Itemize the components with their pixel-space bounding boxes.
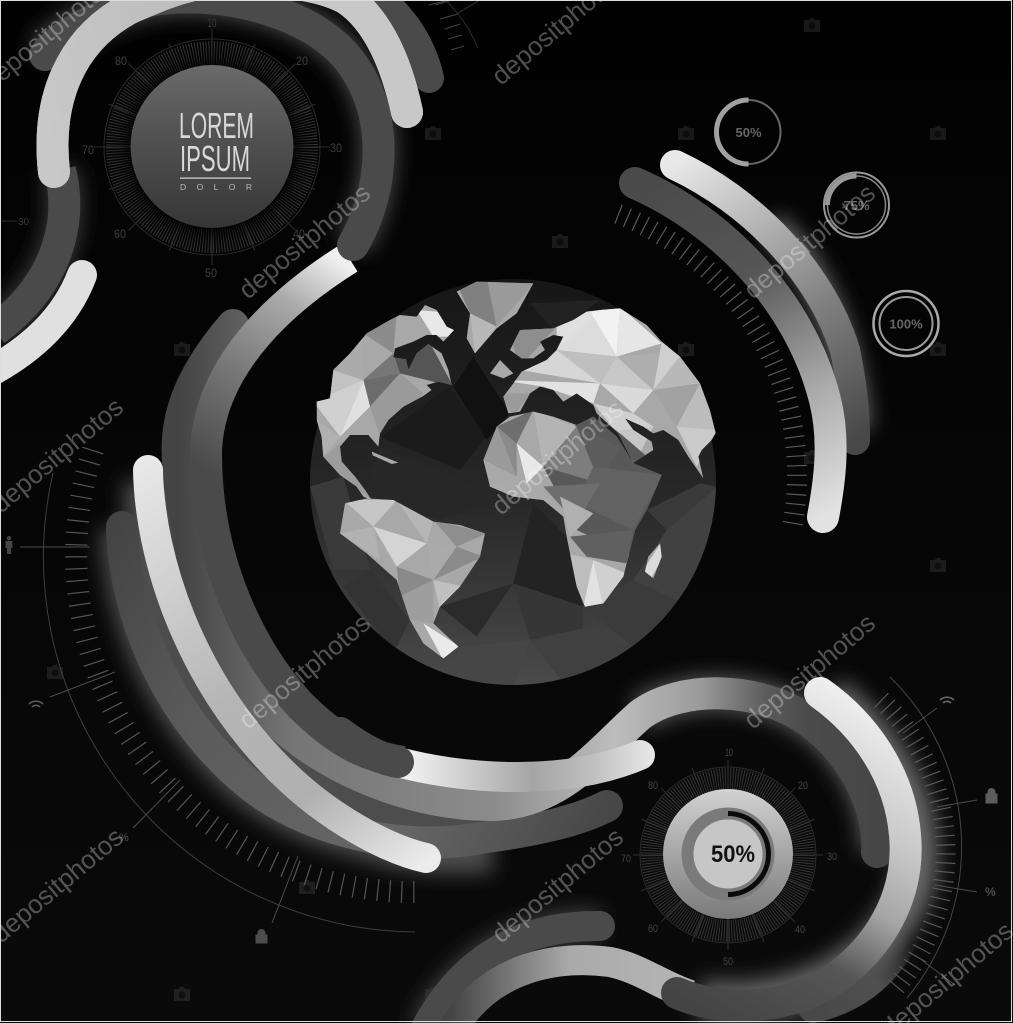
south america (343, 500, 397, 527)
dial scale numbers: 80 (115, 54, 127, 68)
depositphotos watermarks: depositphotos (486, 394, 629, 521)
dial shadow (126, 62, 298, 234)
eurasia (590, 307, 620, 357)
progress ring: 50 percent: 50% (735, 125, 762, 140)
title: lorem ipsum dolor: DOLOR (180, 182, 252, 192)
icon: lock (256, 930, 267, 943)
dial fine tick ring (652, 779, 804, 931)
dial scale numbers (82, 16, 342, 280)
depositphotos watermarks: depositphotos (233, 178, 376, 305)
icon: wifi (940, 697, 954, 703)
ribbon: upper-left S curve dark (0, 170, 64, 330)
label: percent: % (119, 832, 129, 844)
ribbon: upper-right outer (675, 165, 855, 440)
dial thin ring (104, 39, 320, 255)
ribbon: lower-right dark cap end (798, 993, 828, 1023)
panel: top-left dial (82, 16, 342, 280)
dial scale numbers: 50 (205, 266, 217, 280)
progress ring: 100 percent (874, 291, 938, 356)
ribbon: bottom light band (452, 960, 690, 1023)
title: lorem ipsum dolor: IPSUM (180, 138, 250, 179)
panel: lower-right tick arc with icons (881, 677, 997, 998)
depositphotos watermarks: depositphotos (738, 178, 881, 305)
ribbon: main white arc (148, 470, 426, 858)
dial scale numbers: 40 (795, 924, 805, 936)
depositphotos watermarks: depositphotos (486, 822, 629, 949)
africa (543, 413, 667, 557)
panel: left-edge fragment: 30 (18, 217, 30, 228)
icon: lock (986, 788, 997, 803)
ribbon: outer dark band C (122, 527, 607, 843)
panel: left-edge fragment (0, 217, 30, 228)
icon: person (6, 536, 12, 554)
ribbon: upper-right inner (635, 183, 831, 517)
ribbon: top-left dark ring (45, 0, 379, 245)
progress arc: 50 percent (728, 814, 768, 894)
dial scale numbers: 20 (296, 54, 308, 68)
panel: left tick arc with icons (6, 450, 418, 943)
ribbon: top light arc right side overlap (335, 0, 407, 112)
panel: top-right tick fragment (429, 0, 480, 50)
depositphotos watermarks: depositphotos (233, 608, 376, 735)
progress ring: 50 percent (716, 100, 780, 164)
ribbon: top-left light arc overlap (53, 0, 190, 172)
ribbon: light band ending near lower dial (390, 755, 640, 777)
icon: wifi (29, 701, 43, 707)
dial spokes (633, 760, 823, 950)
dial scale numbers: 20 (798, 780, 808, 792)
dial scale numbers (621, 747, 837, 968)
dial scale numbers: 60 (648, 923, 658, 935)
dial scale numbers: 30 (827, 851, 837, 863)
dial scale numbers: 10 (208, 16, 217, 30)
ribbon: lower-right dark cap (813, 935, 905, 1008)
title: lorem ipsum dolor (179, 105, 254, 192)
ribbon: central dark cap over band (340, 733, 398, 762)
ribbon: long gradient band B (178, 325, 877, 852)
chart: low-poly globe (310, 279, 716, 685)
north america (330, 370, 362, 394)
ribbon: lower-right ring (677, 693, 906, 1006)
dial scale numbers: 40 (293, 227, 305, 241)
dial scale numbers: 70 (621, 853, 631, 865)
dial scale numbers: 50 (723, 956, 733, 968)
label: percent: % (985, 885, 996, 899)
ribbon: central S inner band (206, 258, 403, 762)
value: 50 percent: 50% (711, 841, 755, 868)
progress ring: 75 percent (824, 172, 889, 238)
depositphotos watermarks: depositphotos (738, 608, 881, 735)
ribbon: bottom dark band (425, 926, 600, 1023)
ocean facets (310, 300, 717, 687)
progress ring (688, 814, 768, 894)
land facets (316, 282, 716, 658)
dial scale numbers: 30 (330, 141, 342, 155)
dial spokes (94, 29, 330, 265)
ribbon: top-left light arc (53, 0, 407, 172)
dial scale numbers: 60 (114, 227, 126, 241)
panel: upper-right tick arc (618, 214, 797, 528)
greenland (460, 282, 496, 326)
dial scale numbers: 10 (725, 747, 733, 759)
title: lorem ipsum dolor: LOREM (179, 105, 254, 146)
progress ring: 100 percent: 100% (889, 316, 923, 332)
dial disc (663, 789, 793, 919)
dial scale numbers: 70 (82, 143, 94, 157)
panel: lower-right dial (621, 747, 837, 968)
progress ring: 75 percent: 75% (843, 198, 870, 213)
dial fine tick ring (118, 53, 306, 241)
dial scale numbers: 80 (648, 780, 658, 792)
ribbon: upper-left small white (0, 275, 82, 372)
dial disc (130, 65, 294, 228)
centre disc (694, 820, 762, 888)
dial thin ring (640, 767, 816, 943)
madagascar (645, 544, 662, 577)
ribbon: top right dark short (370, 0, 429, 78)
